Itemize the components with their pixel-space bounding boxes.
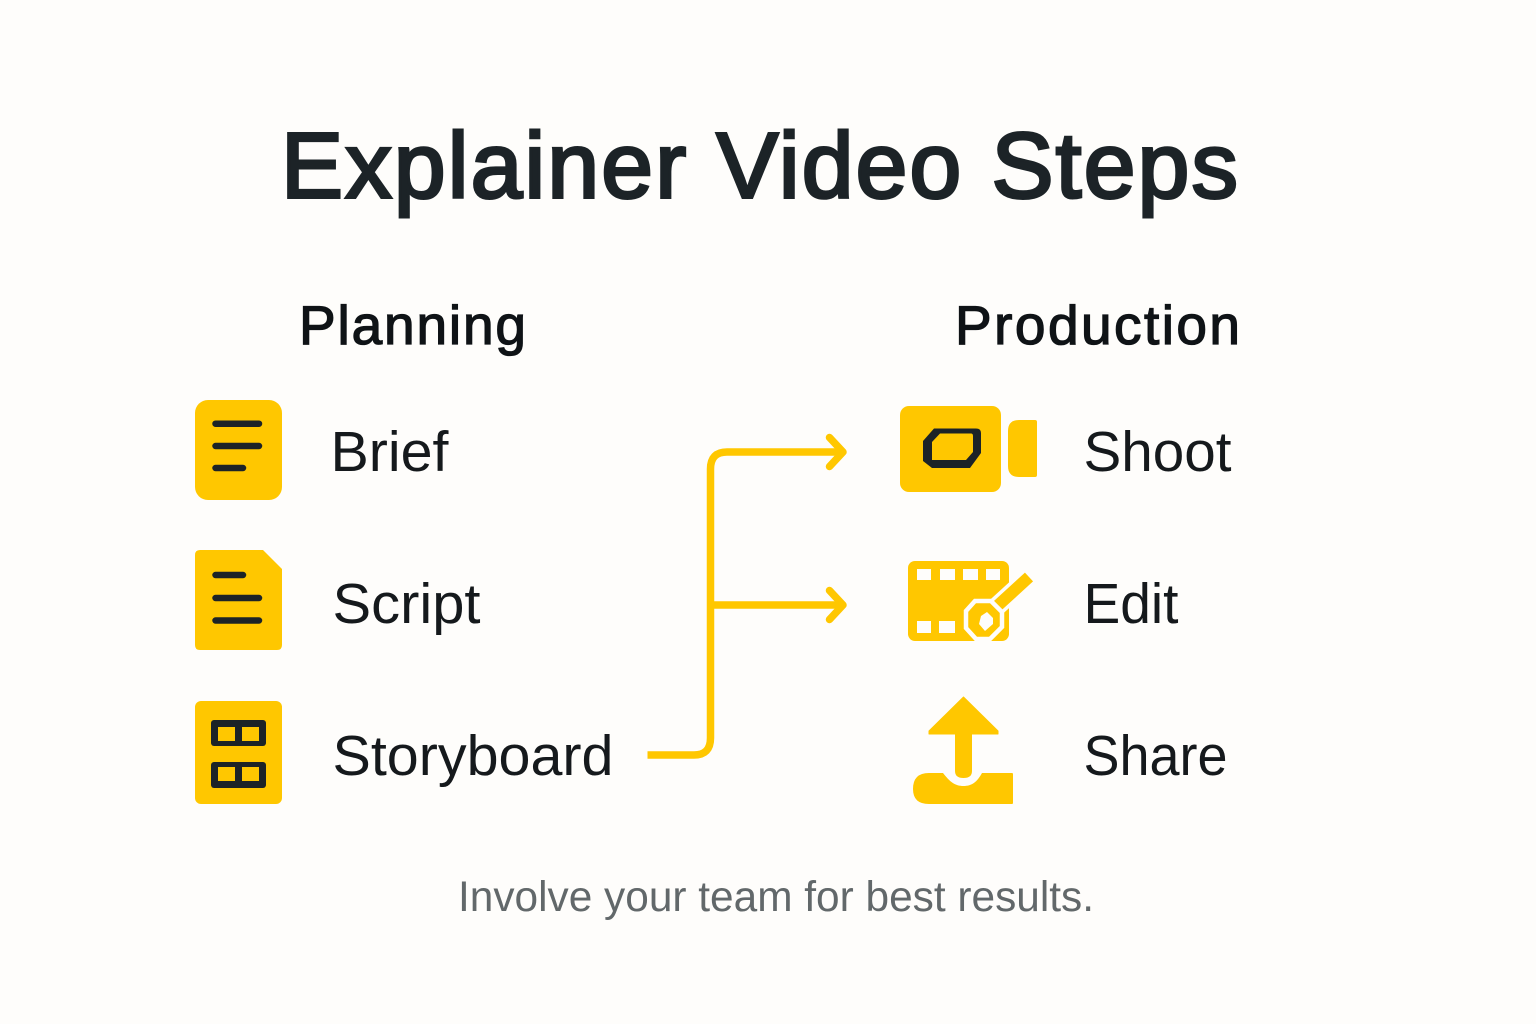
icon: share upload [913,697,1013,804]
label: Script: Script [332,572,481,636]
icon: film edit [908,561,1029,641]
label: Shoot: Shoot [1084,420,1232,484]
label: Edit: Edit [1084,572,1179,636]
heading: Planning: Planning [299,294,526,356]
icon: script page [195,550,282,650]
label: Share: Share [1084,724,1228,788]
arrow: Storyboard to Shoot and Edit [648,438,843,755]
footer note: Involve your team for best results. [458,873,1094,921]
icon: brief document [195,400,282,500]
label: Brief: Brief [330,420,449,484]
icon: video camera [900,406,1037,492]
label: Storyboard: Storyboard [332,724,614,788]
icon: storyboard [195,701,282,804]
heading: Production: Production [955,294,1240,356]
title: Explainer Video Steps [281,114,1238,218]
